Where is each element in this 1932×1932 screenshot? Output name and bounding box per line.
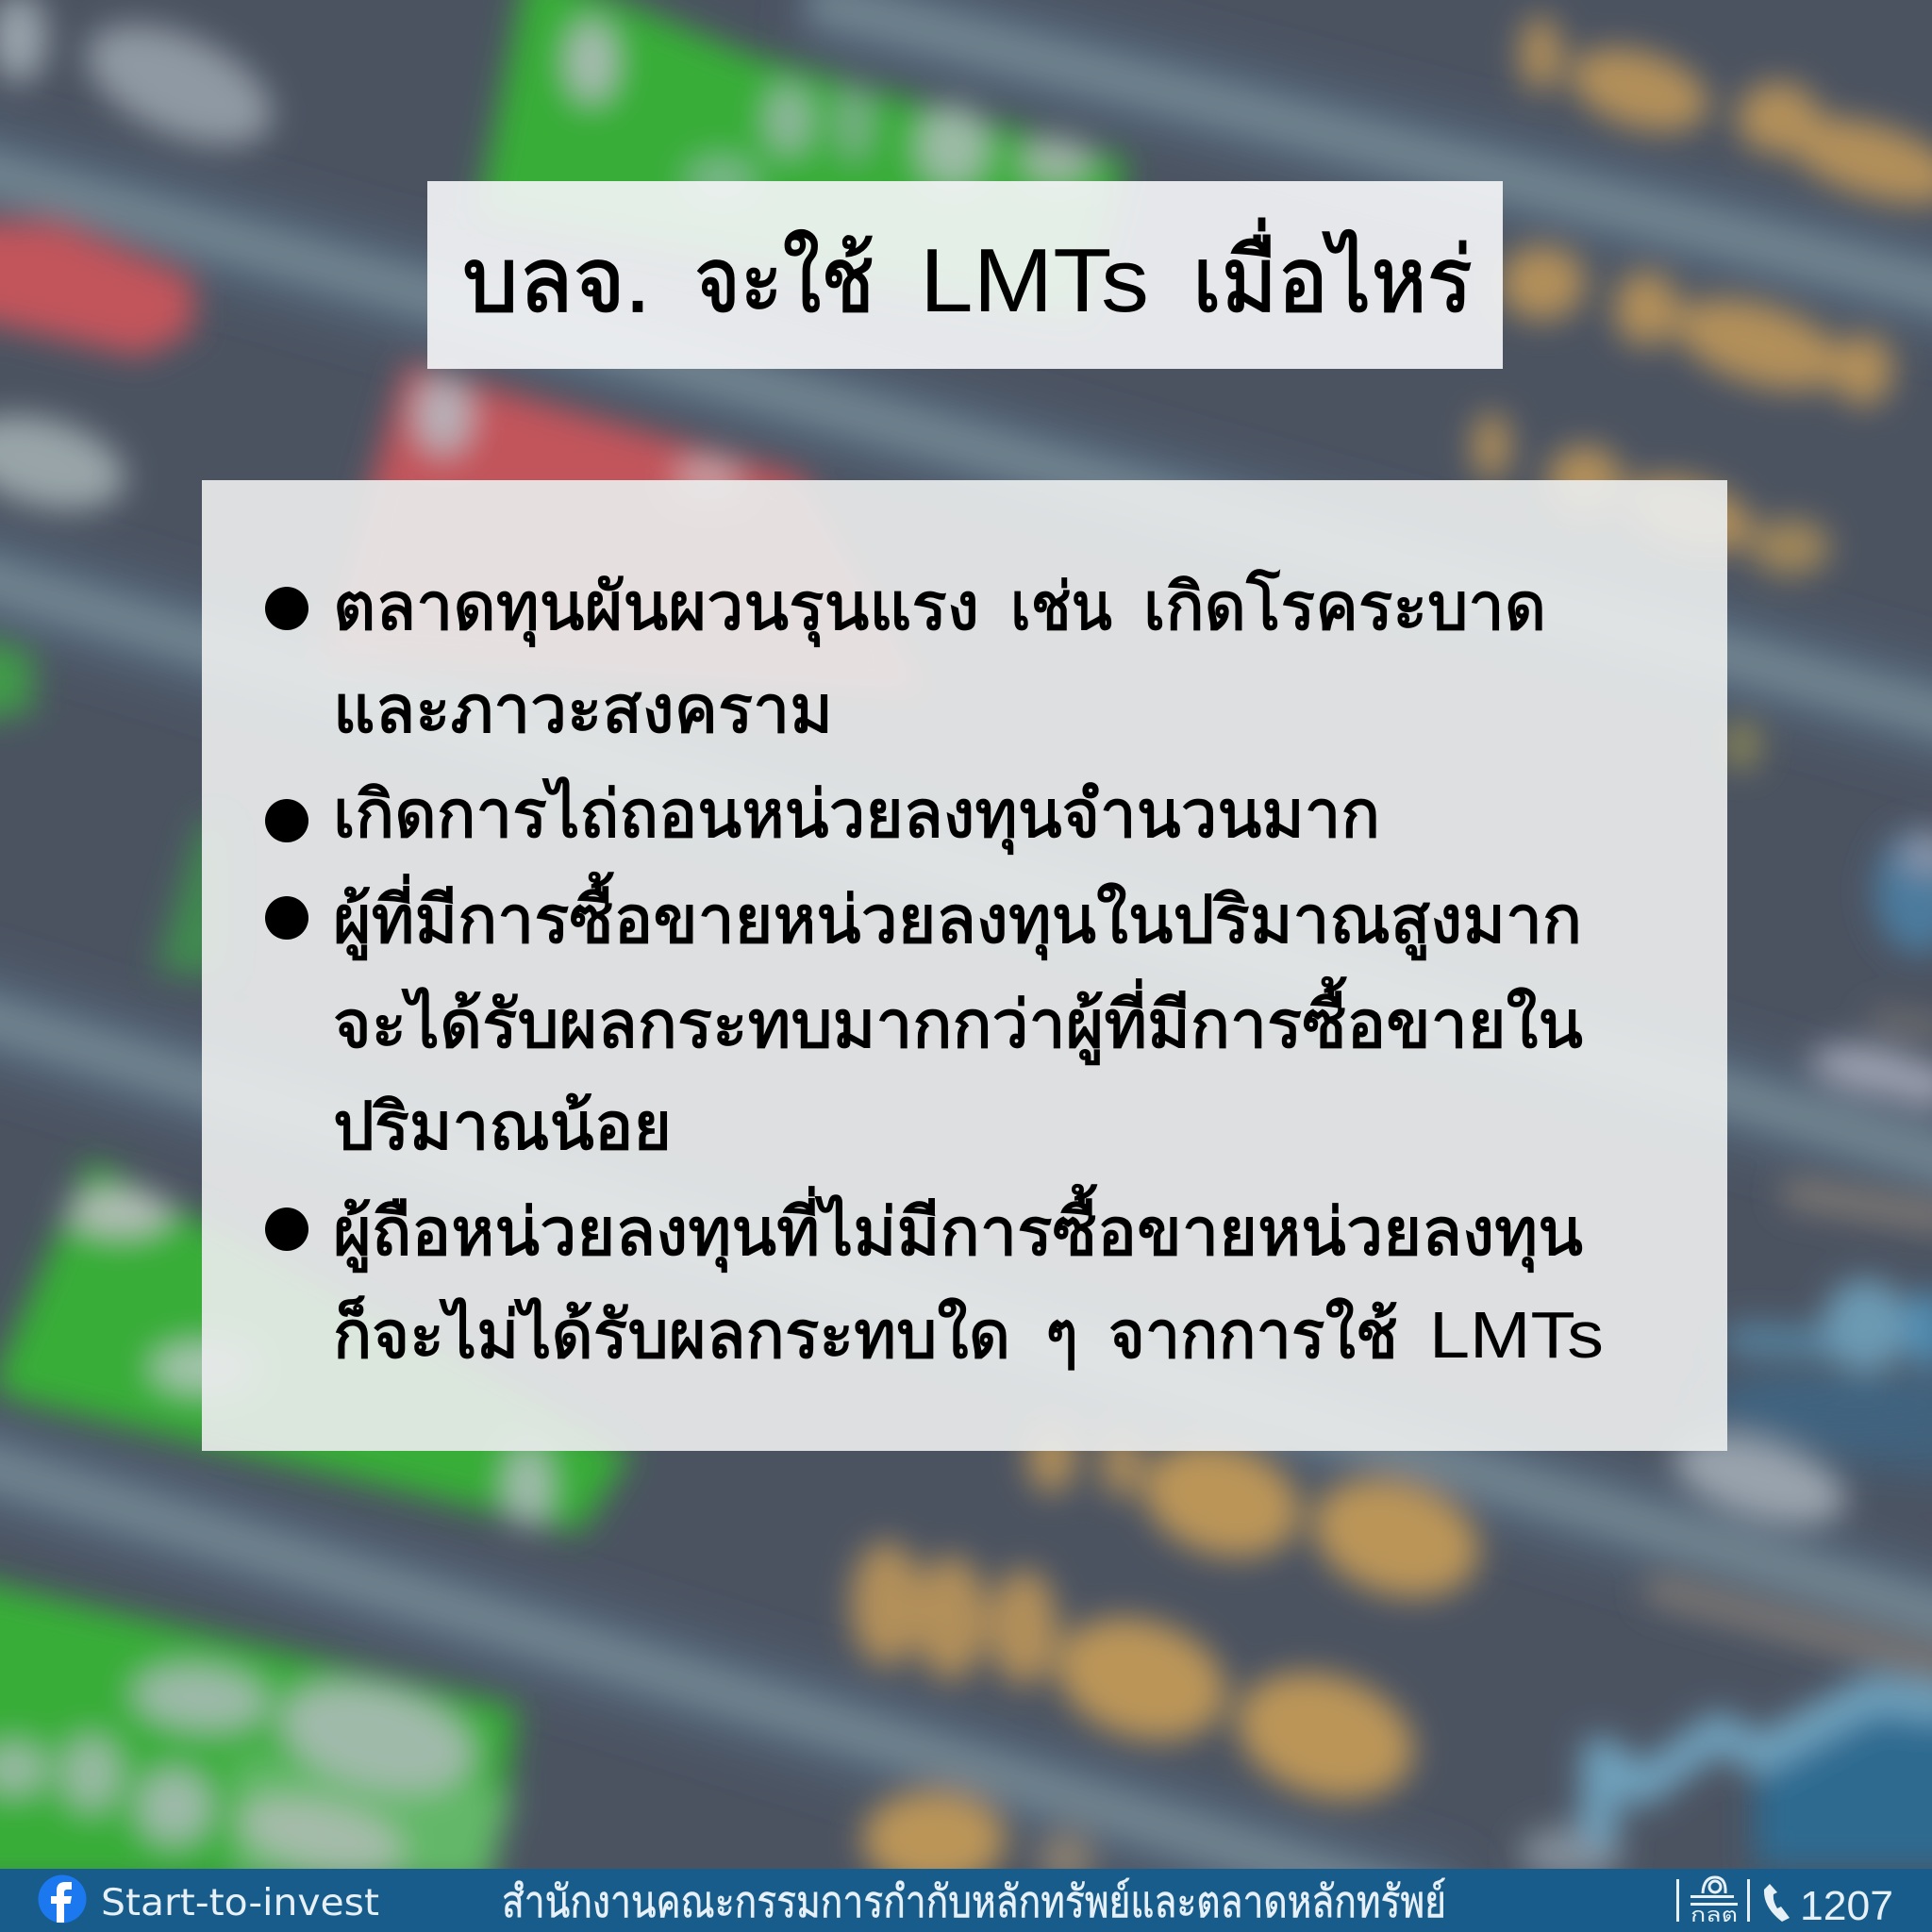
bullet item 2: เกิดการไถ่ถอนหน่วยลงทุนจำนวนมาก <box>333 777 1380 855</box>
panel: body text <box>202 480 1727 1451</box>
bullet item 4: ก็จะไม่ได้รับผลกระทบใด <box>333 1296 1010 1372</box>
logo: SEC: กลต <box>1690 1905 1738 1926</box>
bullet item 1: เช่น <box>1010 570 1112 643</box>
bullet item 1: เกิดโรคระบาด <box>1143 569 1546 643</box>
bullet item 4: LMTs <box>1429 1298 1604 1372</box>
hotline number: 1207 <box>1800 1883 1893 1929</box>
bullet item 1 <box>265 569 1546 746</box>
icon: phone <box>1764 1884 1790 1922</box>
organisation name: สำนักงานคณะกรรมการกำกับหลักทรัพย์และตลาดหลักทรัพย์ <box>502 1876 1446 1926</box>
title text: LMTs <box>920 230 1149 331</box>
panel: title <box>427 181 1503 369</box>
bullet item 4: จากการใช้ <box>1108 1297 1398 1372</box>
icon: facebook <box>38 1875 87 1923</box>
title text <box>462 218 1473 331</box>
title text: บลจ. <box>462 230 650 331</box>
bullet item 4: ๆ <box>1045 1298 1078 1372</box>
facebook page name: Start-to-invest <box>101 1882 379 1924</box>
title text: จะใช้ <box>694 230 874 331</box>
bullet item 1: ตลาดทุนผันผวนรุนแรง <box>333 570 979 647</box>
logo: SEC <box>1676 1877 1750 1926</box>
footer bar <box>0 1869 1932 1932</box>
title text: เมื่อไหร่ <box>1192 218 1473 331</box>
bullet item 4 <box>265 1184 1604 1372</box>
bullet item 4: ผู้ถือหน่วยลงทุนที่ไม่มีการซื้อขายหน่วยลงทุน <box>333 1184 1583 1273</box>
bullet item 3: จะได้รับผลกระทบมากกว่าผู้ที่มีการซื้อขายใน <box>333 976 1583 1065</box>
bullet item 1: และภาวะสงคราม <box>333 673 833 746</box>
bullet item 3: ปริมาณน้อย <box>333 1090 672 1163</box>
bullet item 3 <box>265 872 1583 1163</box>
bullet item 3: ผู้ที่มีการซื้อขายหน่วยลงทุนในปริมาณสูงมาก <box>333 872 1582 960</box>
